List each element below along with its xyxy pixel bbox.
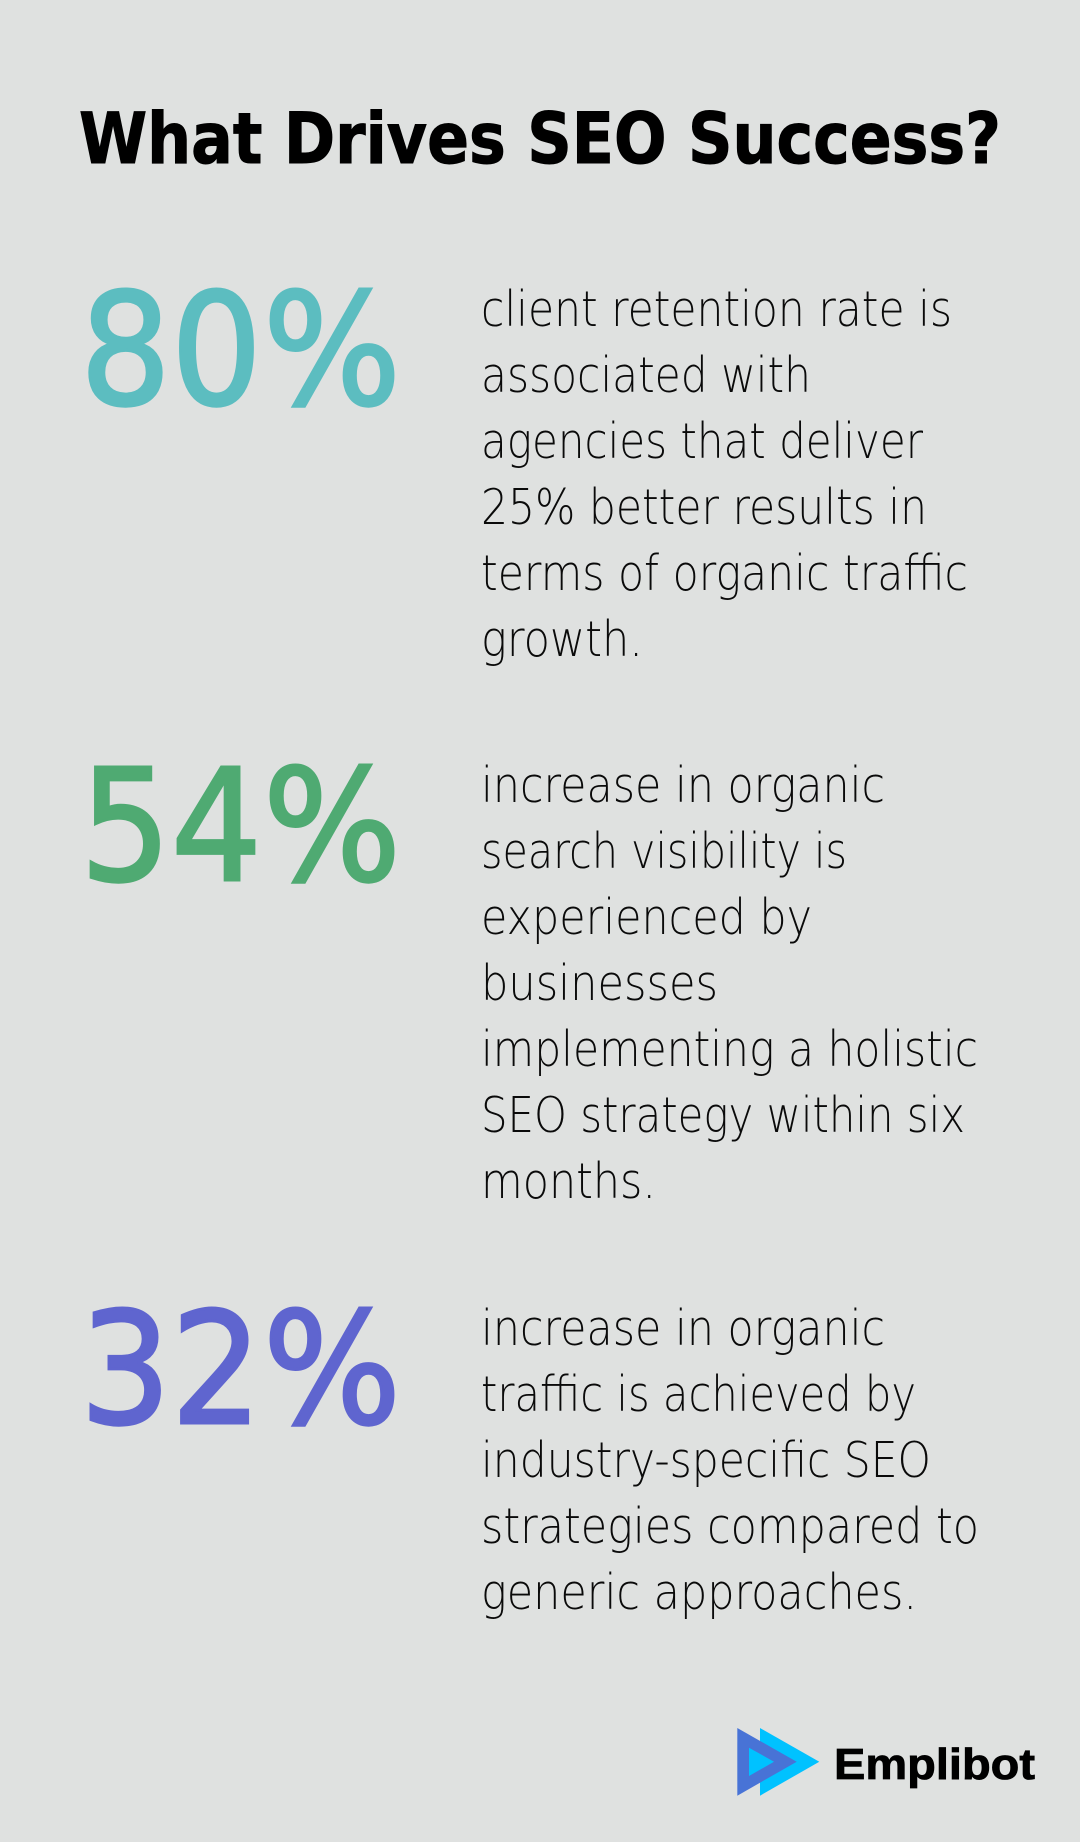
stat description: client retention: associated with	[481, 347, 811, 404]
stat description: client retention: client retention rate is	[481, 281, 952, 338]
stat block: 32% organic traffic	[80, 1279, 979, 1621]
icon: double play triangles	[737, 1728, 819, 1796]
stat number: 80%: %	[263, 260, 401, 441]
stat number: 54%	[80, 736, 401, 917]
stat block: 54% organic search visibility	[80, 736, 978, 1210]
stat block: 80% client retention	[80, 260, 968, 668]
stat description: organic search visibility: experienced by	[481, 889, 812, 946]
stat description: organic traffic: strategies compared to	[481, 1498, 979, 1555]
stat description: client retention: terms of organic traffic	[481, 545, 968, 602]
stat description: organic traffic: generic approaches.	[481, 1564, 917, 1621]
stat description: organic search visibility: search visibility is	[481, 823, 847, 880]
stat number: 80%: 80	[80, 260, 262, 441]
logo wordmark: Emplibot	[834, 1740, 1035, 1789]
stat description: client retention: 25% better results in	[481, 479, 927, 536]
stat description: organic traffic: traffic is achieved by	[481, 1366, 916, 1423]
stat number: 32%	[80, 1279, 401, 1460]
stat description: client retention: growth.	[481, 611, 643, 668]
stat number: 32%: 32	[80, 1279, 262, 1460]
stat description: client retention	[481, 281, 968, 668]
logo: Emplibot	[737, 1728, 1035, 1796]
stat description: organic search visibility: increase in organic	[481, 757, 885, 814]
stat description: organic search visibility: months.	[481, 1153, 656, 1210]
stat description: organic search visibility: implementing a holistic	[481, 1021, 978, 1078]
stat number: 54%: 54	[80, 736, 262, 917]
stat description: organic search visibility	[481, 757, 978, 1210]
stat description: client retention: agencies that deliver	[481, 413, 924, 470]
stat number: 54%: %	[263, 736, 401, 917]
stat description: organic traffic: industry-specific SEO	[481, 1432, 931, 1489]
stat description: organic search visibility: SEO strategy within six	[481, 1087, 965, 1144]
stat number: 32%: %	[263, 1279, 401, 1460]
stat description: organic traffic	[481, 1300, 979, 1621]
stat description: organic search visibility: businesses	[481, 955, 718, 1012]
stat number: 80%	[80, 260, 401, 441]
stat description: organic traffic: increase in organic	[481, 1300, 885, 1357]
